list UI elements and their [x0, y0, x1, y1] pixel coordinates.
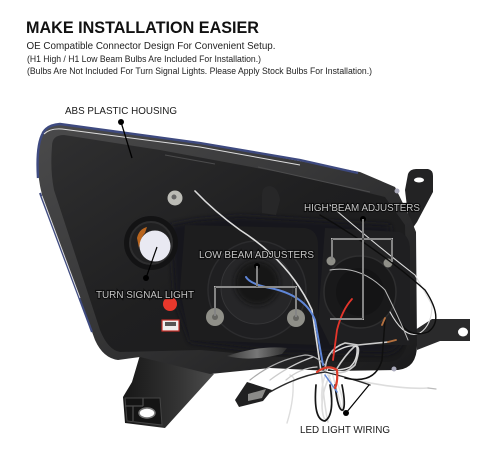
- title: MAKE INSTALLATION EASIER: [26, 18, 259, 37]
- callout: low beam adjusters: [199, 249, 314, 317]
- inner panel: [51, 135, 408, 362]
- white main wires: [195, 191, 328, 422]
- blue wire lower: [325, 375, 337, 392]
- bottom right screw: [392, 366, 396, 372]
- description text block: (H1 High / H1 Low Beam Bulbs Are Included For Installation.): [27, 54, 261, 64]
- description text block: [26, 40, 372, 76]
- wiring harness: [195, 191, 436, 423]
- shadowed inner floor: [170, 216, 402, 354]
- callout: high beam adjusters: HIGH BEAM ADJUSTERS: [304, 202, 420, 214]
- top boss: [262, 186, 280, 215]
- callout: high beam adjusters: [304, 202, 420, 319]
- copper wire ends: [382, 318, 396, 342]
- right lower mounting tab: [415, 319, 470, 350]
- blue wire: [246, 277, 323, 365]
- turn signal socket: [124, 216, 178, 270]
- callout: turn signal light: [96, 247, 195, 301]
- high beam module: [318, 228, 410, 345]
- low beam module: [180, 225, 318, 345]
- red wire: [333, 299, 352, 360]
- low beam adjuster screws: [206, 308, 305, 327]
- bottom lens reflection: [227, 347, 287, 359]
- sealing dot: [163, 297, 177, 311]
- high beam adjuster screws: [326, 256, 392, 268]
- right upper mounting tab: [405, 169, 433, 232]
- top right screw: [394, 188, 400, 194]
- bracket slot: [414, 178, 424, 182]
- callout: ABS plastic housing: [65, 106, 177, 158]
- headlight assembly: [38, 124, 470, 428]
- callout: LED light wiring: [300, 385, 390, 436]
- blue left rim: [40, 193, 92, 332]
- grey bolt: [168, 190, 182, 206]
- housing body: [38, 124, 417, 374]
- description text block: OE Compatible Connector Design For Convenient Setup.: [26, 40, 276, 52]
- lower mounting bracket: [123, 355, 214, 428]
- small warning label: [162, 320, 179, 331]
- callout: LED light wiring: LED LIGHT WIRING: [300, 425, 390, 436]
- callout: low beam adjusters: LOW BEAM ADJUSTERS: [199, 249, 314, 261]
- callout: ABS plastic housing: ABS PLASTIC HOUSING: [65, 106, 177, 117]
- ridge lines: [165, 155, 370, 192]
- callout: turn signal light: TURN SIGNAL LIGHT: [96, 289, 195, 301]
- white rim highlight: [42, 129, 300, 298]
- wiring connector: [235, 382, 272, 407]
- red tie: [317, 367, 337, 388]
- blue housing rim: [38, 124, 358, 178]
- description text block: (Bulbs Are Not Included For Turn Signal Lights. Please Apply Stock Bulbs For Installation.): [27, 66, 372, 76]
